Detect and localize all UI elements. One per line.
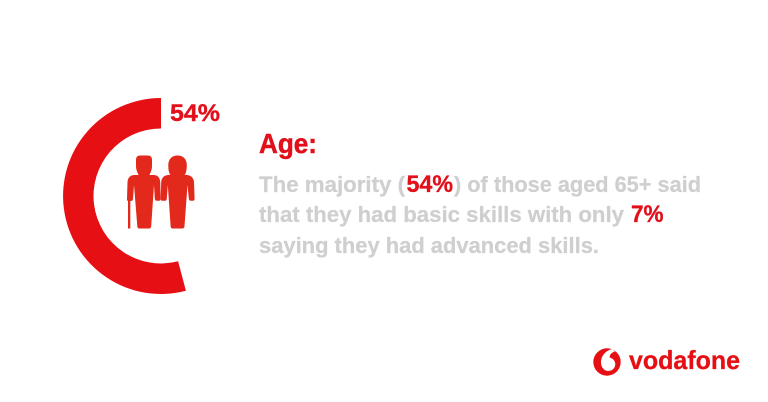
wordmark: vodafone: [629, 345, 740, 375]
body text: that they had basic skills with only: [259, 202, 624, 227]
body text: [259, 171, 701, 258]
icon: elderly couple: [127, 156, 195, 228]
body text: 54%: [406, 171, 453, 198]
heading: Age:: [259, 128, 317, 159]
icon: vodafone speech mark: [593, 348, 621, 376]
body text: 7%: [631, 201, 664, 228]
body text: The majority (: [259, 172, 405, 197]
body text: ) of those aged 65+ said: [454, 172, 701, 197]
donut value label: 54%: [170, 100, 220, 127]
vodafone logo: [593, 345, 740, 376]
icon: woman: [161, 156, 195, 228]
body text: saying they had advanced skills.: [259, 233, 599, 258]
donut chart: 54% arc: [63, 98, 186, 294]
icon: man with cane: [127, 156, 161, 228]
